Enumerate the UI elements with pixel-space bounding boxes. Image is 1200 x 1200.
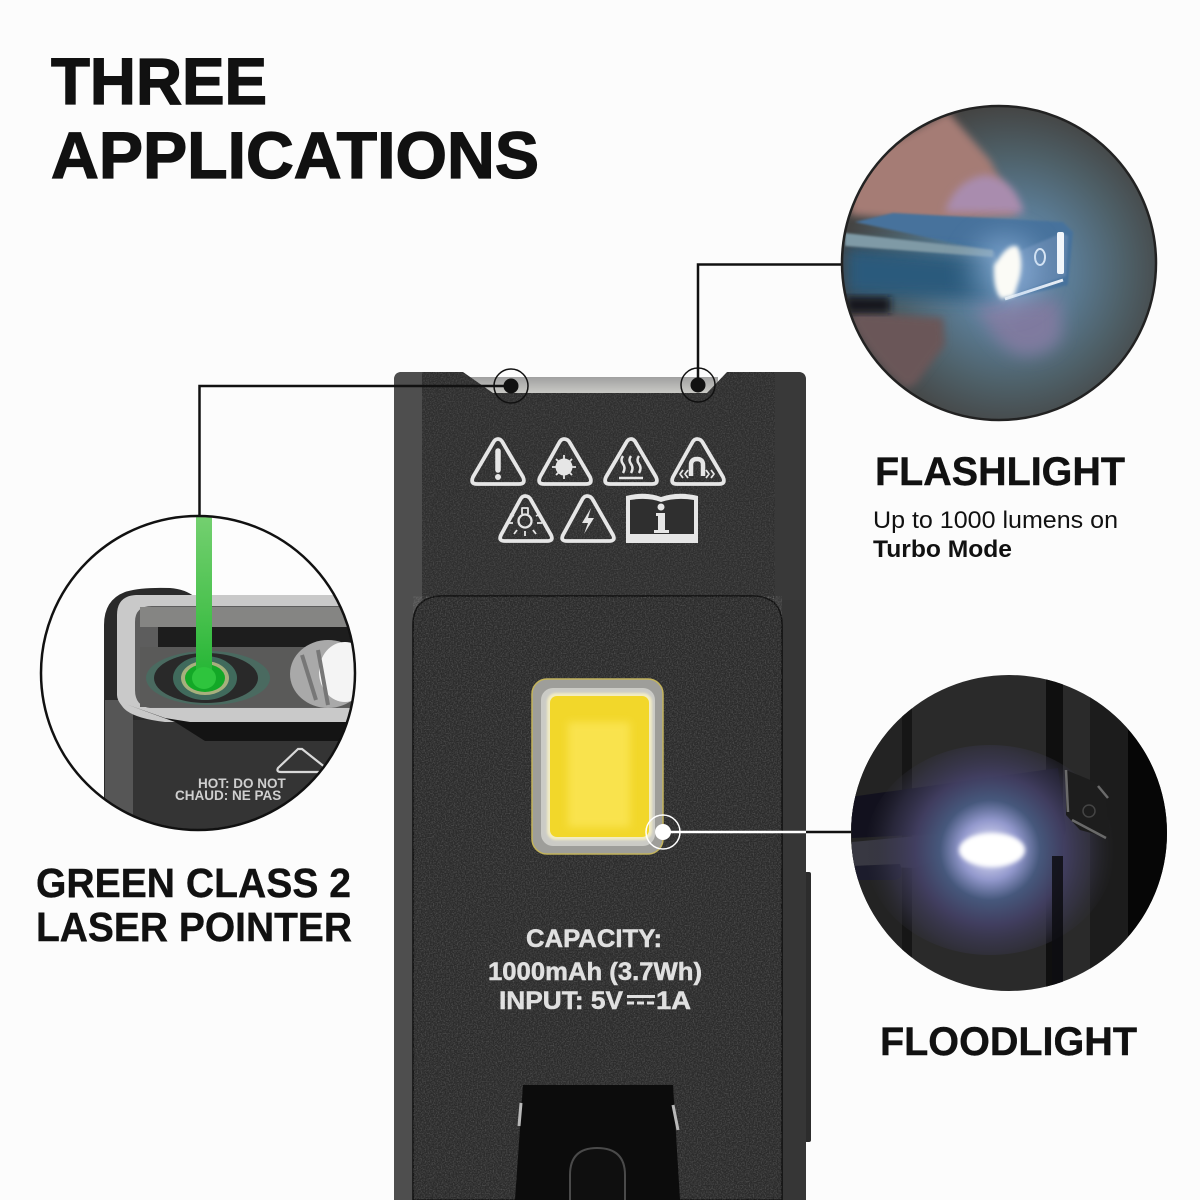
device housing (104, 588, 350, 829)
LED hotspot (959, 833, 1025, 867)
label: flashlight (873, 450, 1125, 563)
title (51, 44, 539, 192)
body shell (394, 372, 806, 1200)
capacity text: CAPACITY: (526, 925, 662, 953)
silver lens bezel (117, 595, 360, 722)
recessed panel (413, 596, 806, 1200)
label: floodlight: FLOODLIGHT (880, 1020, 1137, 1064)
connector: laser pointer (200, 369, 528, 517)
silver front edge (470, 377, 718, 395)
safety icons (472, 439, 724, 543)
laser beam (196, 516, 212, 681)
icon: warning (472, 439, 524, 484)
description: Turbo Mode (873, 536, 1012, 563)
belt clip cutout (515, 1085, 680, 1200)
description: Up to 1000 lumens on (873, 507, 1118, 534)
glow (865, 745, 1115, 955)
icon: electric shock (562, 496, 614, 541)
device head (1066, 770, 1103, 834)
lit lens face (1016, 234, 1068, 293)
label: flashlight: FLASHLIGHT (875, 450, 1125, 494)
housing shadow band (129, 705, 346, 741)
small warning icon (277, 749, 326, 772)
description (873, 507, 1118, 563)
capacity text: 1A (656, 987, 691, 1015)
icon: magnet (672, 439, 724, 484)
title: APPLICATIONS (51, 118, 539, 192)
photo circle: green laser (40, 514, 356, 832)
fingers (848, 112, 1018, 222)
photo circle: green laser: CHAUD: NE PAS (175, 788, 281, 803)
device wedge (851, 768, 1058, 838)
flashlight reflector (290, 640, 351, 708)
label: laser pointer: LASER POINTER (36, 904, 352, 950)
window glass (135, 606, 360, 708)
photo circle: floodlight (850, 675, 1168, 995)
device: flashlight body (394, 372, 811, 1200)
device body (855, 213, 1073, 300)
label: laser pointer (36, 860, 352, 950)
COB floodlight LED (532, 679, 663, 854)
connector: flashlight (681, 264, 845, 402)
capacity text: INPUT: 5V (499, 987, 623, 1015)
dark background slats (851, 714, 905, 952)
laser aperture rings (146, 651, 270, 705)
icon: bright light (500, 496, 552, 541)
photo circle: flashlight (840, 105, 1160, 425)
label: laser pointer: GREEN CLASS 2 (36, 860, 351, 906)
connector: floodlight (646, 815, 853, 849)
icon: instruction manual (626, 494, 698, 543)
capacity text: 1000mAh (3.7Wh) (488, 958, 702, 986)
capacity text (488, 925, 702, 1015)
side button (803, 872, 811, 1142)
icon: laser (539, 439, 591, 484)
title: THREE (51, 44, 267, 118)
printed label: HOT: DO NOT (198, 776, 286, 791)
icon: hot surface (605, 439, 657, 484)
